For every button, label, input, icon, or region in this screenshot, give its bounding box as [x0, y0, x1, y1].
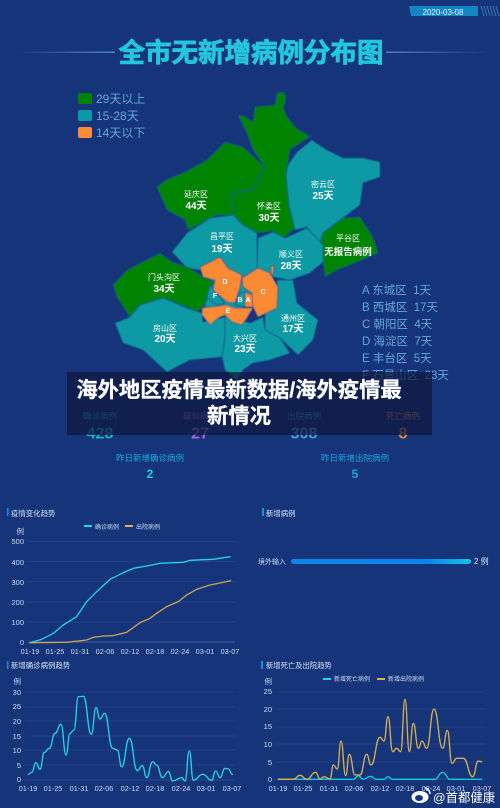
stat: suspected: [183, 411, 217, 442]
date tag: [409, 6, 499, 17]
chart: new deaths and discharged trend: 25: [264, 687, 272, 696]
chart: epidemic trend: 02-06: [96, 647, 114, 656]
map labels: 房山区: [153, 323, 177, 333]
chart: new confirmed trend: 01-19: [19, 784, 37, 793]
stat: confirmed: 428: [87, 426, 113, 442]
legend: 29天以上: [96, 92, 145, 106]
chart: new deaths and discharged trend: 0: [268, 775, 272, 784]
map labels: 23天: [234, 343, 256, 355]
map region: Shunyi: [257, 228, 323, 280]
watermark: Weibo: [412, 788, 495, 805]
chart: new confirmed trend: 02-18: [146, 784, 164, 793]
map region: Huairou: [232, 92, 312, 238]
map region: enclave: [271, 266, 274, 275]
chart: epidemic trend: 03-07: [221, 647, 239, 656]
headline banner: [67, 372, 432, 435]
chart: epidemic trend: 500: [11, 537, 24, 546]
map region: Daxing: [222, 316, 290, 380]
map region: Mentougou: [113, 253, 215, 317]
district day list: D 海淀区 7天: [362, 334, 433, 348]
chart: new confirmed trend: 30: [13, 688, 21, 697]
chart: new confirmed trend: 02-06: [95, 784, 113, 793]
map labels: E: [226, 308, 231, 315]
map labels: 17天: [282, 323, 304, 335]
stat: discharged: 出院病例: [287, 411, 321, 421]
chart: new deaths and discharged trend: [261, 661, 491, 793]
stat: discharged: 308: [291, 426, 317, 442]
map region: Dongcheng: [245, 292, 253, 307]
map labels: F: [213, 293, 218, 300]
chart: epidemic trend: 0: [20, 638, 24, 647]
district day list: E 丰台区 5天: [362, 351, 432, 365]
district day list: C 朝阳区 4天: [362, 318, 433, 331]
title: 全市无新增病例分布图: [118, 38, 384, 68]
stat: suspected: 27: [191, 426, 209, 442]
legend: 15-28天: [96, 109, 139, 123]
stat: confirmed: 确诊病例: [83, 411, 117, 421]
map region: Fangshan: [115, 298, 225, 372]
chart: new deaths and discharged trend: 20: [264, 705, 272, 714]
chart: new deaths and discharged trend: 新增死亡病例: [334, 675, 370, 683]
chart: epidemic trend: 400: [11, 558, 24, 567]
district day list: B 西城区 17天: [362, 301, 439, 314]
stat: new confirmed yesterday: 2: [147, 467, 154, 481]
stat: new confirmed yesterday: 昨日新增确诊病例: [116, 453, 184, 463]
map region: Pinggu: [320, 217, 378, 277]
chart: new confirmed trend: 新增确诊病例趋势: [11, 661, 71, 670]
chart: new confirmed trend: 15: [13, 732, 21, 741]
map labels: 30天: [258, 212, 280, 224]
map labels: C: [260, 289, 266, 296]
map labels: 顺义区: [279, 250, 303, 259]
chart: new deaths and discharged trend: 新增死亡及出院趋势: [266, 661, 332, 670]
map labels: B: [237, 297, 243, 304]
chart: new deaths and discharged trend: 03-07: [473, 784, 491, 793]
map region: Tongzhou: [265, 280, 318, 355]
chart: epidemic trend: 例: [16, 526, 24, 536]
map labels: 20天: [154, 333, 176, 345]
legend: 14天以下: [96, 126, 145, 140]
map region: Fengtai: [202, 305, 253, 325]
date tag: 2020-03-08: [423, 8, 464, 17]
chart: new confirmed trend: 01-25: [44, 784, 62, 793]
chart: epidemic trend: 01-19: [21, 647, 39, 656]
map labels: 平谷区: [336, 234, 360, 243]
legend: [78, 92, 145, 140]
map labels: 通州区: [281, 313, 305, 323]
chart: new confirmed trend: 0: [17, 775, 21, 784]
district day list: F 石景山区 23天: [362, 369, 449, 382]
chart: new confirmed trend: 03-01: [197, 784, 215, 793]
chart: new confirmed trend: 10: [13, 746, 21, 755]
chart: new confirmed trend: 例: [14, 676, 21, 686]
stat: new confirmed yesterday: [116, 453, 184, 481]
map labels: 25天: [312, 190, 334, 202]
chart: new confirmed trend: [7, 661, 241, 793]
chart: epidemic trend: 01-31: [71, 647, 89, 656]
chart: new cases bar: [258, 508, 489, 566]
map labels: 28天: [280, 260, 302, 272]
map region: Miyun: [286, 140, 380, 243]
chart: epidemic trend: 03-01: [196, 647, 214, 656]
chart: new deaths and discharged trend: 5: [268, 758, 272, 767]
map labels: 34天: [153, 283, 175, 295]
map labels: 延庆区: [184, 189, 208, 199]
map labels: 大兴区: [233, 333, 257, 343]
district day list: [362, 284, 449, 382]
chart: epidemic trend: 200: [11, 598, 24, 607]
map labels: 无报告病例: [324, 246, 372, 258]
chart: epidemic trend: 02-12: [121, 647, 139, 656]
chart: new deaths and discharged trend: 15: [264, 722, 272, 731]
chart: new deaths and discharged trend: 01-25: [294, 784, 312, 793]
chart: epidemic trend: 出院病例: [136, 523, 160, 531]
chart: epidemic trend: 疫情变化趋势: [11, 509, 56, 518]
stat: deaths: 8: [399, 426, 408, 442]
map labels: 怀柔区: [257, 201, 281, 211]
map labels: 密云区: [311, 179, 335, 189]
chart: new deaths and discharged trend: 02-24: [422, 784, 440, 793]
stat: new discharged yesterday: 昨日新增出院病例: [321, 453, 389, 463]
headline banner: 海外地区疫情最新数据/海外疫情最: [76, 378, 402, 402]
chart: new confirmed trend: 03-07: [223, 784, 241, 793]
stat: new discharged yesterday: [321, 453, 389, 481]
stat: suspected: 疑似病例: [183, 411, 217, 421]
chart: epidemic trend: 确诊病例: [95, 523, 119, 531]
chart: new confirmed trend: 25: [13, 702, 21, 711]
map labels: A: [245, 297, 251, 304]
chart: new confirmed trend: 5: [17, 761, 21, 770]
chart: new cases bar: 2 例: [474, 556, 489, 566]
district day list: A 东城区 1天: [362, 284, 432, 297]
district map: [113, 92, 380, 380]
chart: new cases bar: 境外输入: [258, 557, 286, 566]
chart: epidemic trend: 02-24: [171, 647, 189, 656]
map labels: 昌平区: [210, 232, 234, 241]
chart: new cases bar: 新增病例: [266, 509, 296, 518]
stat: new discharged yesterday: 5: [352, 467, 359, 481]
chart: new confirmed trend: 01-31: [70, 784, 88, 793]
chart: epidemic trend: [7, 508, 239, 656]
chart: new deaths and discharged trend: 例: [264, 676, 272, 686]
chart: new deaths and discharged trend: 01-19: [269, 784, 287, 793]
map region: Shijingshan: [207, 285, 225, 305]
map labels: 19天: [211, 243, 233, 255]
map region: Yanqing: [157, 142, 265, 230]
chart: epidemic trend: 01-25: [46, 647, 64, 656]
chart: new deaths and discharged trend: 01-31: [320, 784, 338, 793]
chart: epidemic trend: 100: [11, 618, 24, 627]
chart: new deaths and discharged trend: 03-01: [447, 784, 465, 793]
stat: confirmed: [83, 411, 117, 442]
map region: Chaoyang: [242, 268, 278, 317]
chart: new deaths and discharged trend: 02-12: [371, 784, 389, 793]
map region: Haidian: [200, 257, 242, 303]
stat: deaths: 死亡病例: [386, 411, 420, 421]
map labels: D: [222, 279, 228, 286]
chart: new deaths and discharged trend: 02-18: [396, 784, 414, 793]
chart: new confirmed trend: 20: [13, 717, 21, 726]
stat: discharged: [287, 411, 321, 442]
chart: epidemic trend: 300: [11, 578, 24, 587]
map region: Xicheng: [235, 292, 245, 307]
stat: deaths: [386, 411, 420, 442]
chart: new deaths and discharged trend: 02-06: [345, 784, 363, 793]
map labels: [148, 179, 372, 355]
chart: new confirmed trend: 02-12: [121, 784, 139, 793]
map region: Changping and city core: [172, 215, 258, 312]
map labels: 44天: [185, 200, 207, 212]
chart: epidemic trend: 02-18: [146, 647, 164, 656]
watermark: Weibo: @首都健康: [433, 790, 495, 805]
map labels: 门头沟区: [148, 272, 180, 282]
chart: new deaths and discharged trend: 10: [264, 740, 272, 749]
chart: new deaths and discharged trend: 新增出院病例: [388, 675, 424, 683]
headline banner: 新情况: [207, 404, 271, 428]
chart: new confirmed trend: 02-24: [172, 784, 190, 793]
